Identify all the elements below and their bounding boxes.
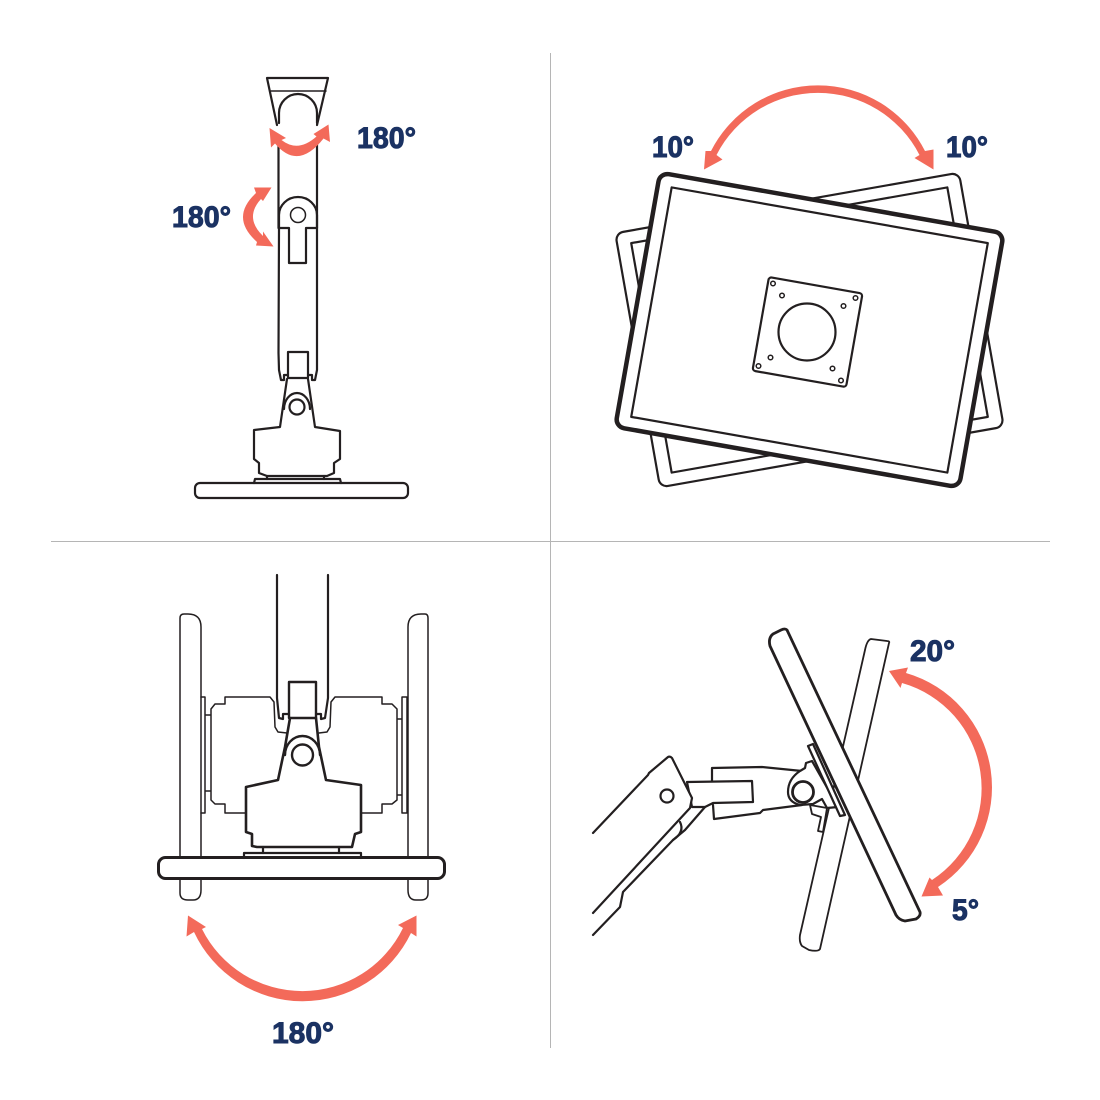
label: 20 degrees: 20°	[910, 635, 955, 668]
panel: monitor rotation	[615, 85, 1004, 487]
mounting plate with holes	[752, 277, 863, 387]
arrow: middle swivel	[243, 188, 274, 246]
label: 180 degrees left: 180°	[172, 201, 231, 234]
label: 10 degrees left: 10°	[652, 131, 694, 164]
label: 5 degrees: 5°	[952, 894, 979, 927]
front monitor position	[769, 629, 920, 921]
arrow: tilt	[889, 668, 992, 896]
side monitors	[180, 614, 428, 900]
label: 10 degrees right: 10°	[946, 131, 988, 164]
rear brackets	[201, 697, 407, 813]
panel: swing, top view	[158, 575, 444, 1050]
arrow: rotation	[704, 85, 934, 170]
arrow: swing	[186, 916, 416, 1001]
panel: tilt, side view	[593, 629, 992, 951]
label: 180 degrees bottom: 180°	[272, 1017, 334, 1050]
front monitor rotated 10 degrees	[615, 173, 1004, 487]
arm body with wedge, pivots and base	[195, 78, 408, 498]
tilt joint and mounting plate	[788, 744, 845, 832]
arm and tilt head	[158, 575, 444, 878]
panel: arm swivel, side view	[172, 78, 416, 498]
label: 180 degrees top: 180°	[357, 122, 416, 155]
rear monitor position	[800, 639, 889, 951]
arrow: top swivel	[270, 124, 330, 156]
back monitor rotated -10 degrees	[615, 173, 1004, 487]
arm and link	[593, 757, 802, 935]
